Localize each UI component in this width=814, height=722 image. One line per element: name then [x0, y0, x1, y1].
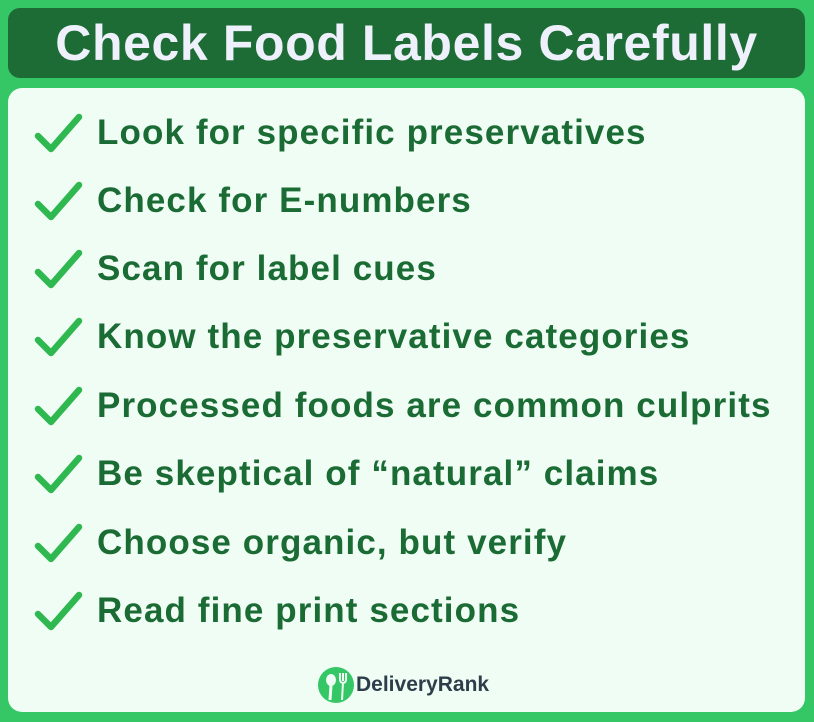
item 6: Be skeptical of “natural” claims: [97, 454, 659, 493]
header: [8, 8, 805, 78]
item 1: Look for specific preservatives: [97, 113, 647, 152]
item 5: Processed foods are common culprits: [97, 386, 772, 425]
logo: [318, 667, 489, 703]
title: Check Food Labels Carefully: [55, 15, 758, 71]
item 7: Choose organic, but verify: [97, 523, 567, 562]
item 2: Check for E-numbers: [97, 181, 472, 220]
icon: fork and spoon: [318, 667, 354, 703]
logo: DeliveryRank: [356, 673, 489, 696]
item 4: Know the preservative categories: [97, 317, 690, 356]
item 3: Scan for label cues: [97, 249, 437, 288]
item 8: Read fine print sections: [97, 591, 520, 630]
